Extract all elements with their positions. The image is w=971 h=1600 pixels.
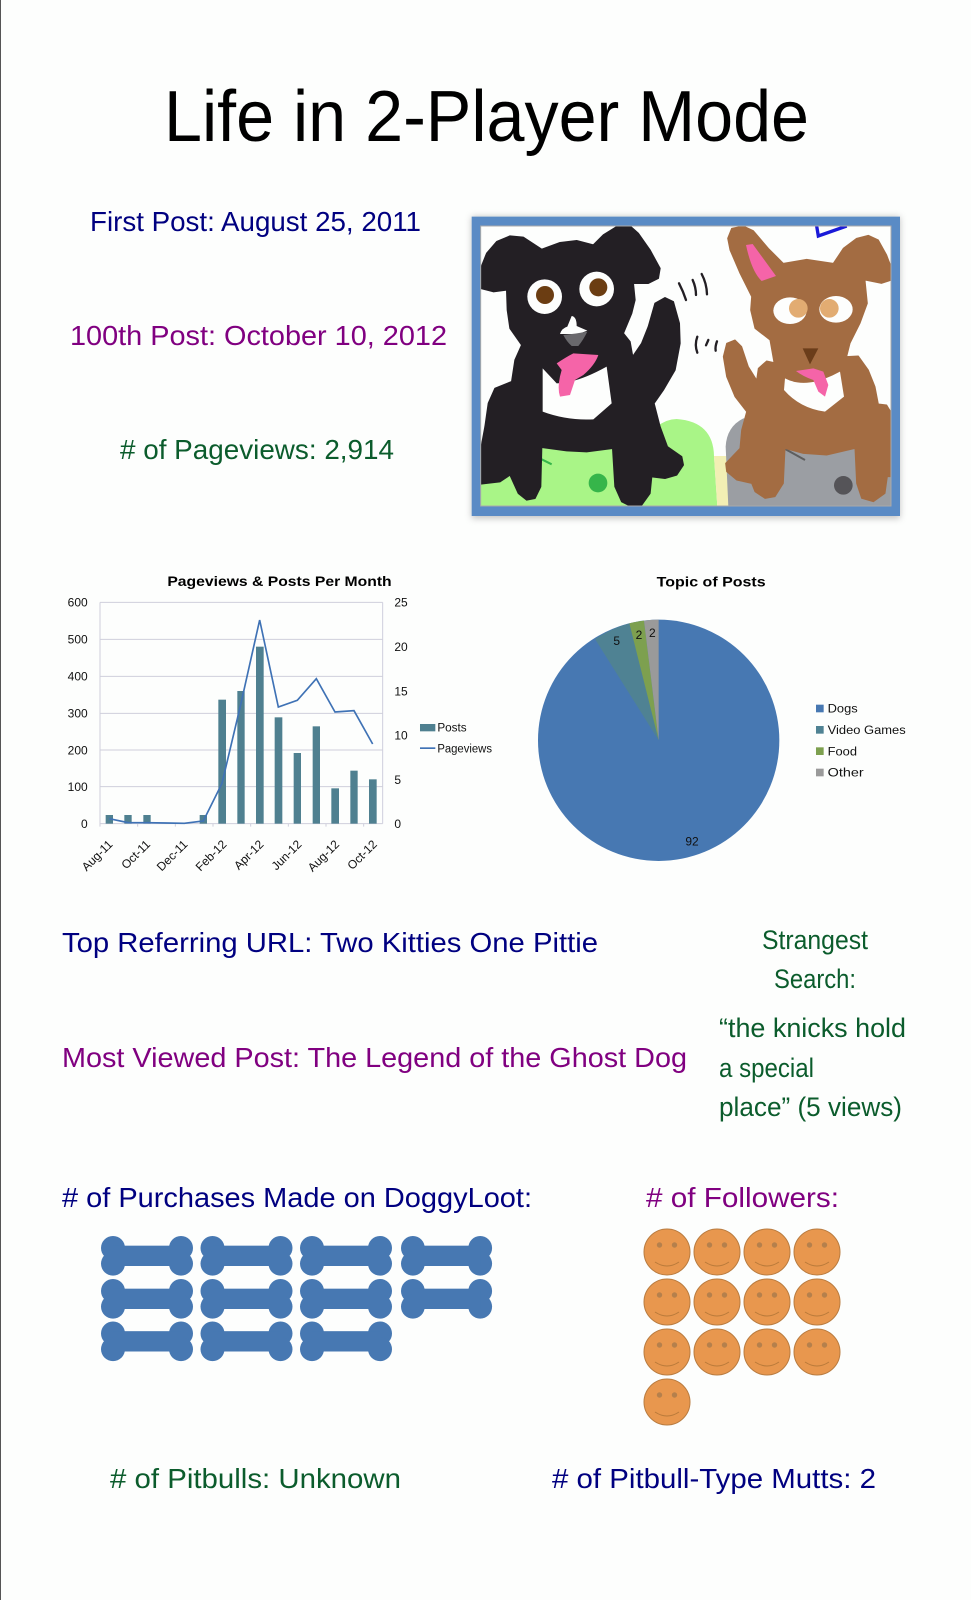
pie values: 5 [613, 634, 620, 648]
pie values: 2 [636, 628, 643, 642]
heading: purchases: # of Purchases Made on DoggyLoot: [62, 1182, 532, 1213]
month labels: Aug-12 [305, 837, 342, 874]
chart legend [420, 721, 492, 755]
left axis labels: 0 [81, 817, 88, 831]
month labels [79, 837, 380, 874]
pie legend: Video Games [828, 723, 906, 737]
pie legend: Food [828, 744, 857, 758]
wag marks [679, 274, 717, 353]
heading: followers: # of Followers: [646, 1182, 839, 1213]
pie legend [816, 701, 906, 780]
stat: strangest search [719, 925, 906, 1122]
pie legend: Dogs [828, 701, 858, 715]
month labels: Aug-11 [79, 837, 116, 874]
stat: pitbulls: # of Pitbulls: Unknown [110, 1463, 401, 1494]
stat: most viewed post: Most Viewed Post: The Legend of the Ghost Dog [62, 1042, 687, 1073]
right axis labels: 10 [394, 729, 408, 743]
left axis labels: 400 [68, 670, 88, 684]
right axis labels: 5 [394, 773, 401, 787]
brown dog [723, 226, 892, 502]
title: Life in 2-Player Mode [164, 77, 809, 157]
stat: strangest search: place” (5 views) [719, 1092, 902, 1122]
month labels: Dec-11 [154, 837, 191, 874]
right axis labels: 15 [394, 684, 408, 698]
pie values [613, 626, 699, 849]
stat: 100th post: 100th Post: October 10, 2012 [70, 320, 447, 351]
left axis labels: 200 [68, 743, 88, 757]
right axis labels: 20 [394, 640, 408, 654]
left axis labels: 300 [68, 707, 88, 721]
chart title: Pageviews & Posts Per Month [167, 573, 392, 589]
stat: strangest search: a special [719, 1053, 814, 1083]
left axis labels: 100 [68, 780, 88, 794]
month labels: Feb-12 [193, 837, 230, 874]
posts bars [106, 647, 377, 824]
smiley pictogram: followers [644, 1229, 840, 1425]
stat: first post: First Post: August 25, 2011 [90, 206, 421, 237]
pageviews line [109, 620, 373, 823]
stat: strangest search: Search: [774, 964, 856, 994]
chart: pageviews and posts per month [68, 573, 492, 874]
bone pictogram: purchases [101, 1236, 492, 1361]
month labels: Jun-12 [269, 837, 305, 873]
pie title: Topic of Posts [657, 574, 766, 590]
month labels: Oct-12 [344, 837, 380, 873]
left axis labels [68, 596, 88, 831]
left axis labels: 600 [68, 596, 88, 610]
chart: topic of posts pie [538, 574, 906, 861]
stat: strangest search: “the knicks hold [719, 1013, 906, 1043]
pie slices [538, 620, 779, 861]
pie legend: Other [828, 766, 864, 780]
stat: strangest search: Strangest [762, 925, 868, 955]
pie values: 92 [685, 835, 699, 849]
right axis labels: 25 [394, 596, 408, 610]
right axis labels [394, 596, 408, 831]
pie values: 2 [649, 626, 656, 640]
right axis labels: 0 [394, 817, 401, 831]
stat: top referring URL: Top Referring URL: Two Kitties One Pittie [62, 927, 598, 958]
month labels: Oct-11 [118, 837, 153, 872]
black dog [481, 226, 683, 507]
chart legend: Pageviews [437, 741, 492, 755]
chart legend: Posts [437, 721, 467, 735]
month labels: Apr-12 [231, 837, 267, 873]
illustration: two dogs in blue frame [472, 217, 900, 518]
left axis labels: 500 [68, 633, 88, 647]
stat: pageviews: # of Pageviews: 2,914 [120, 434, 394, 465]
stat: pitbull-type mutts: # of Pitbull-Type Mutts: 2 [552, 1463, 876, 1494]
